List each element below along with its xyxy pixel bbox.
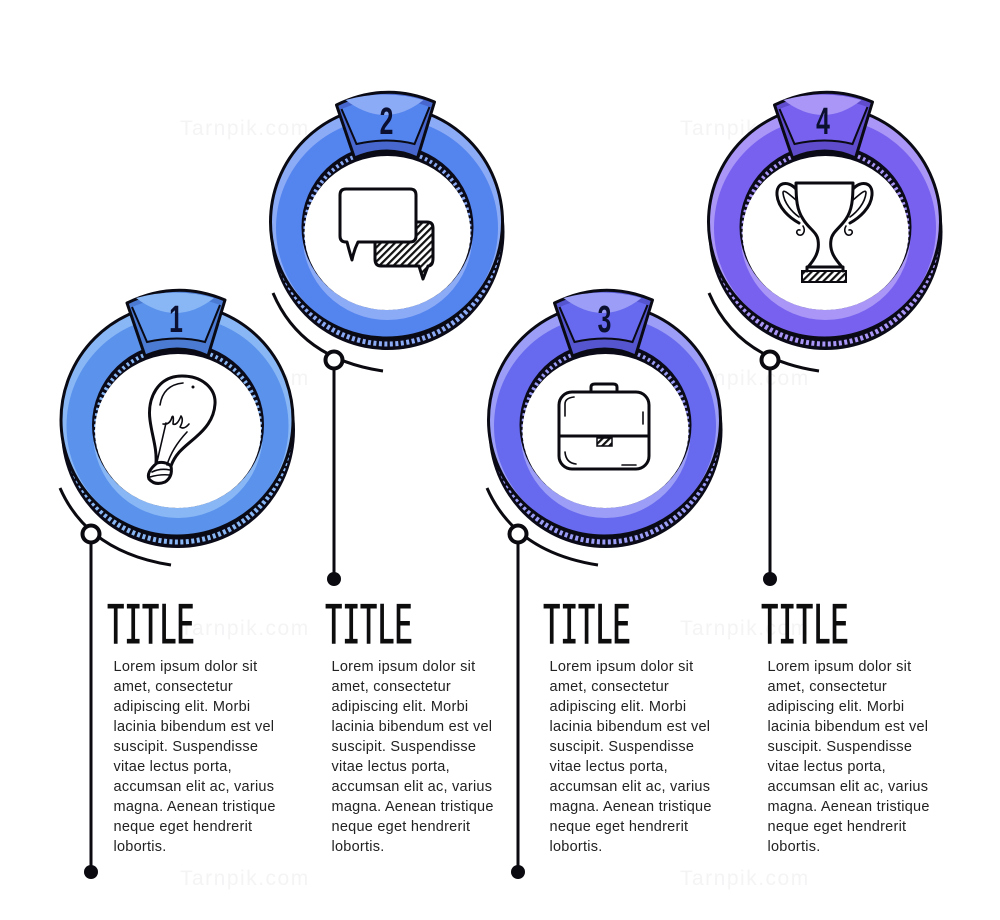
body 1: accumsan elit ac, varius bbox=[114, 779, 274, 795]
body 4: accumsan elit ac, varius bbox=[768, 779, 928, 795]
watermarks: Tarnpik.com bbox=[180, 367, 310, 390]
watermarks: Tarnpik.com bbox=[680, 367, 810, 390]
watermarks: Tarnpik.com bbox=[680, 867, 810, 890]
icon: speech bubbles bbox=[340, 189, 433, 279]
body 3: Lorem ipsum dolor sit bbox=[550, 659, 693, 675]
number 3: 3 bbox=[598, 298, 611, 340]
body 3: vitae lectus porta, bbox=[550, 759, 668, 775]
body 1: adipiscing elit. Morbi bbox=[114, 699, 250, 715]
icon: trophy bbox=[777, 183, 872, 282]
title 3: TITLE bbox=[543, 595, 630, 663]
watermarks: Tarnpik.com bbox=[680, 117, 810, 140]
body 2: lacinia bibendum est vel bbox=[332, 719, 492, 735]
body 3: adipiscing elit. Morbi bbox=[550, 699, 686, 715]
connector 2 bbox=[273, 293, 383, 586]
body 4: vitae lectus porta, bbox=[768, 759, 886, 775]
body 1: vitae lectus porta, bbox=[114, 759, 232, 775]
ring 3 bbox=[488, 290, 722, 548]
body 2: vitae lectus porta, bbox=[332, 759, 450, 775]
body 1: magna. Aenean tristique bbox=[114, 799, 276, 815]
body 4: Lorem ipsum dolor sit bbox=[768, 659, 911, 675]
connector 4 bbox=[709, 293, 819, 586]
body 4: lacinia bibendum est vel bbox=[768, 719, 928, 735]
title 1: TITLE bbox=[107, 595, 194, 663]
body 3: suscipit. Suspendisse bbox=[550, 739, 694, 755]
body 1: neque eget hendrerit bbox=[114, 819, 252, 835]
ring 2 bbox=[270, 92, 504, 350]
body 4: neque eget hendrerit bbox=[768, 819, 906, 835]
body 3: amet, consectetur bbox=[550, 679, 669, 695]
number 4: 4 bbox=[816, 100, 830, 142]
connector 1 bbox=[60, 488, 171, 879]
column 4 text bbox=[761, 595, 930, 855]
body 3: neque eget hendrerit bbox=[550, 819, 688, 835]
body 1: amet, consectetur bbox=[114, 679, 233, 695]
body 2: suscipit. Suspendisse bbox=[332, 739, 476, 755]
title 4: TITLE bbox=[761, 595, 848, 663]
body 1: suscipit. Suspendisse bbox=[114, 739, 258, 755]
column 1 text bbox=[107, 595, 276, 855]
body 4: suscipit. Suspendisse bbox=[768, 739, 912, 755]
title 2: TITLE bbox=[325, 595, 412, 663]
body 4: amet, consectetur bbox=[768, 679, 887, 695]
body 3: lacinia bibendum est vel bbox=[550, 719, 710, 735]
watermarks: Tarnpik.com bbox=[180, 617, 310, 640]
body 4: magna. Aenean tristique bbox=[768, 799, 930, 815]
body 4: lobortis. bbox=[768, 839, 821, 855]
watermarks bbox=[180, 117, 810, 890]
number 2: 2 bbox=[380, 100, 393, 142]
body 1: lobortis. bbox=[114, 839, 167, 855]
body 2: adipiscing elit. Morbi bbox=[332, 699, 468, 715]
icon: light bulb bbox=[148, 376, 215, 483]
body 2: amet, consectetur bbox=[332, 679, 451, 695]
watermarks: Tarnpik.com bbox=[180, 867, 310, 890]
watermarks: Tarnpik.com bbox=[180, 117, 310, 140]
body 2: Lorem ipsum dolor sit bbox=[332, 659, 475, 675]
connector 3 bbox=[487, 488, 598, 879]
column 2 text bbox=[325, 595, 494, 855]
body 1: Lorem ipsum dolor sit bbox=[114, 659, 257, 675]
body 2: magna. Aenean tristique bbox=[332, 799, 494, 815]
number 1: 1 bbox=[169, 298, 183, 340]
body 4: adipiscing elit. Morbi bbox=[768, 699, 904, 715]
body 3: lobortis. bbox=[550, 839, 603, 855]
ring 1 bbox=[61, 290, 295, 548]
body 2: neque eget hendrerit bbox=[332, 819, 470, 835]
ring 4 bbox=[708, 92, 942, 350]
body 2: accumsan elit ac, varius bbox=[332, 779, 492, 795]
column 3 text bbox=[543, 595, 712, 855]
body 3: accumsan elit ac, varius bbox=[550, 779, 710, 795]
watermarks: Tarnpik.com bbox=[680, 617, 810, 640]
body 3: magna. Aenean tristique bbox=[550, 799, 712, 815]
body 1: lacinia bibendum est vel bbox=[114, 719, 274, 735]
body 2: lobortis. bbox=[332, 839, 385, 855]
icon: briefcase bbox=[559, 384, 649, 469]
